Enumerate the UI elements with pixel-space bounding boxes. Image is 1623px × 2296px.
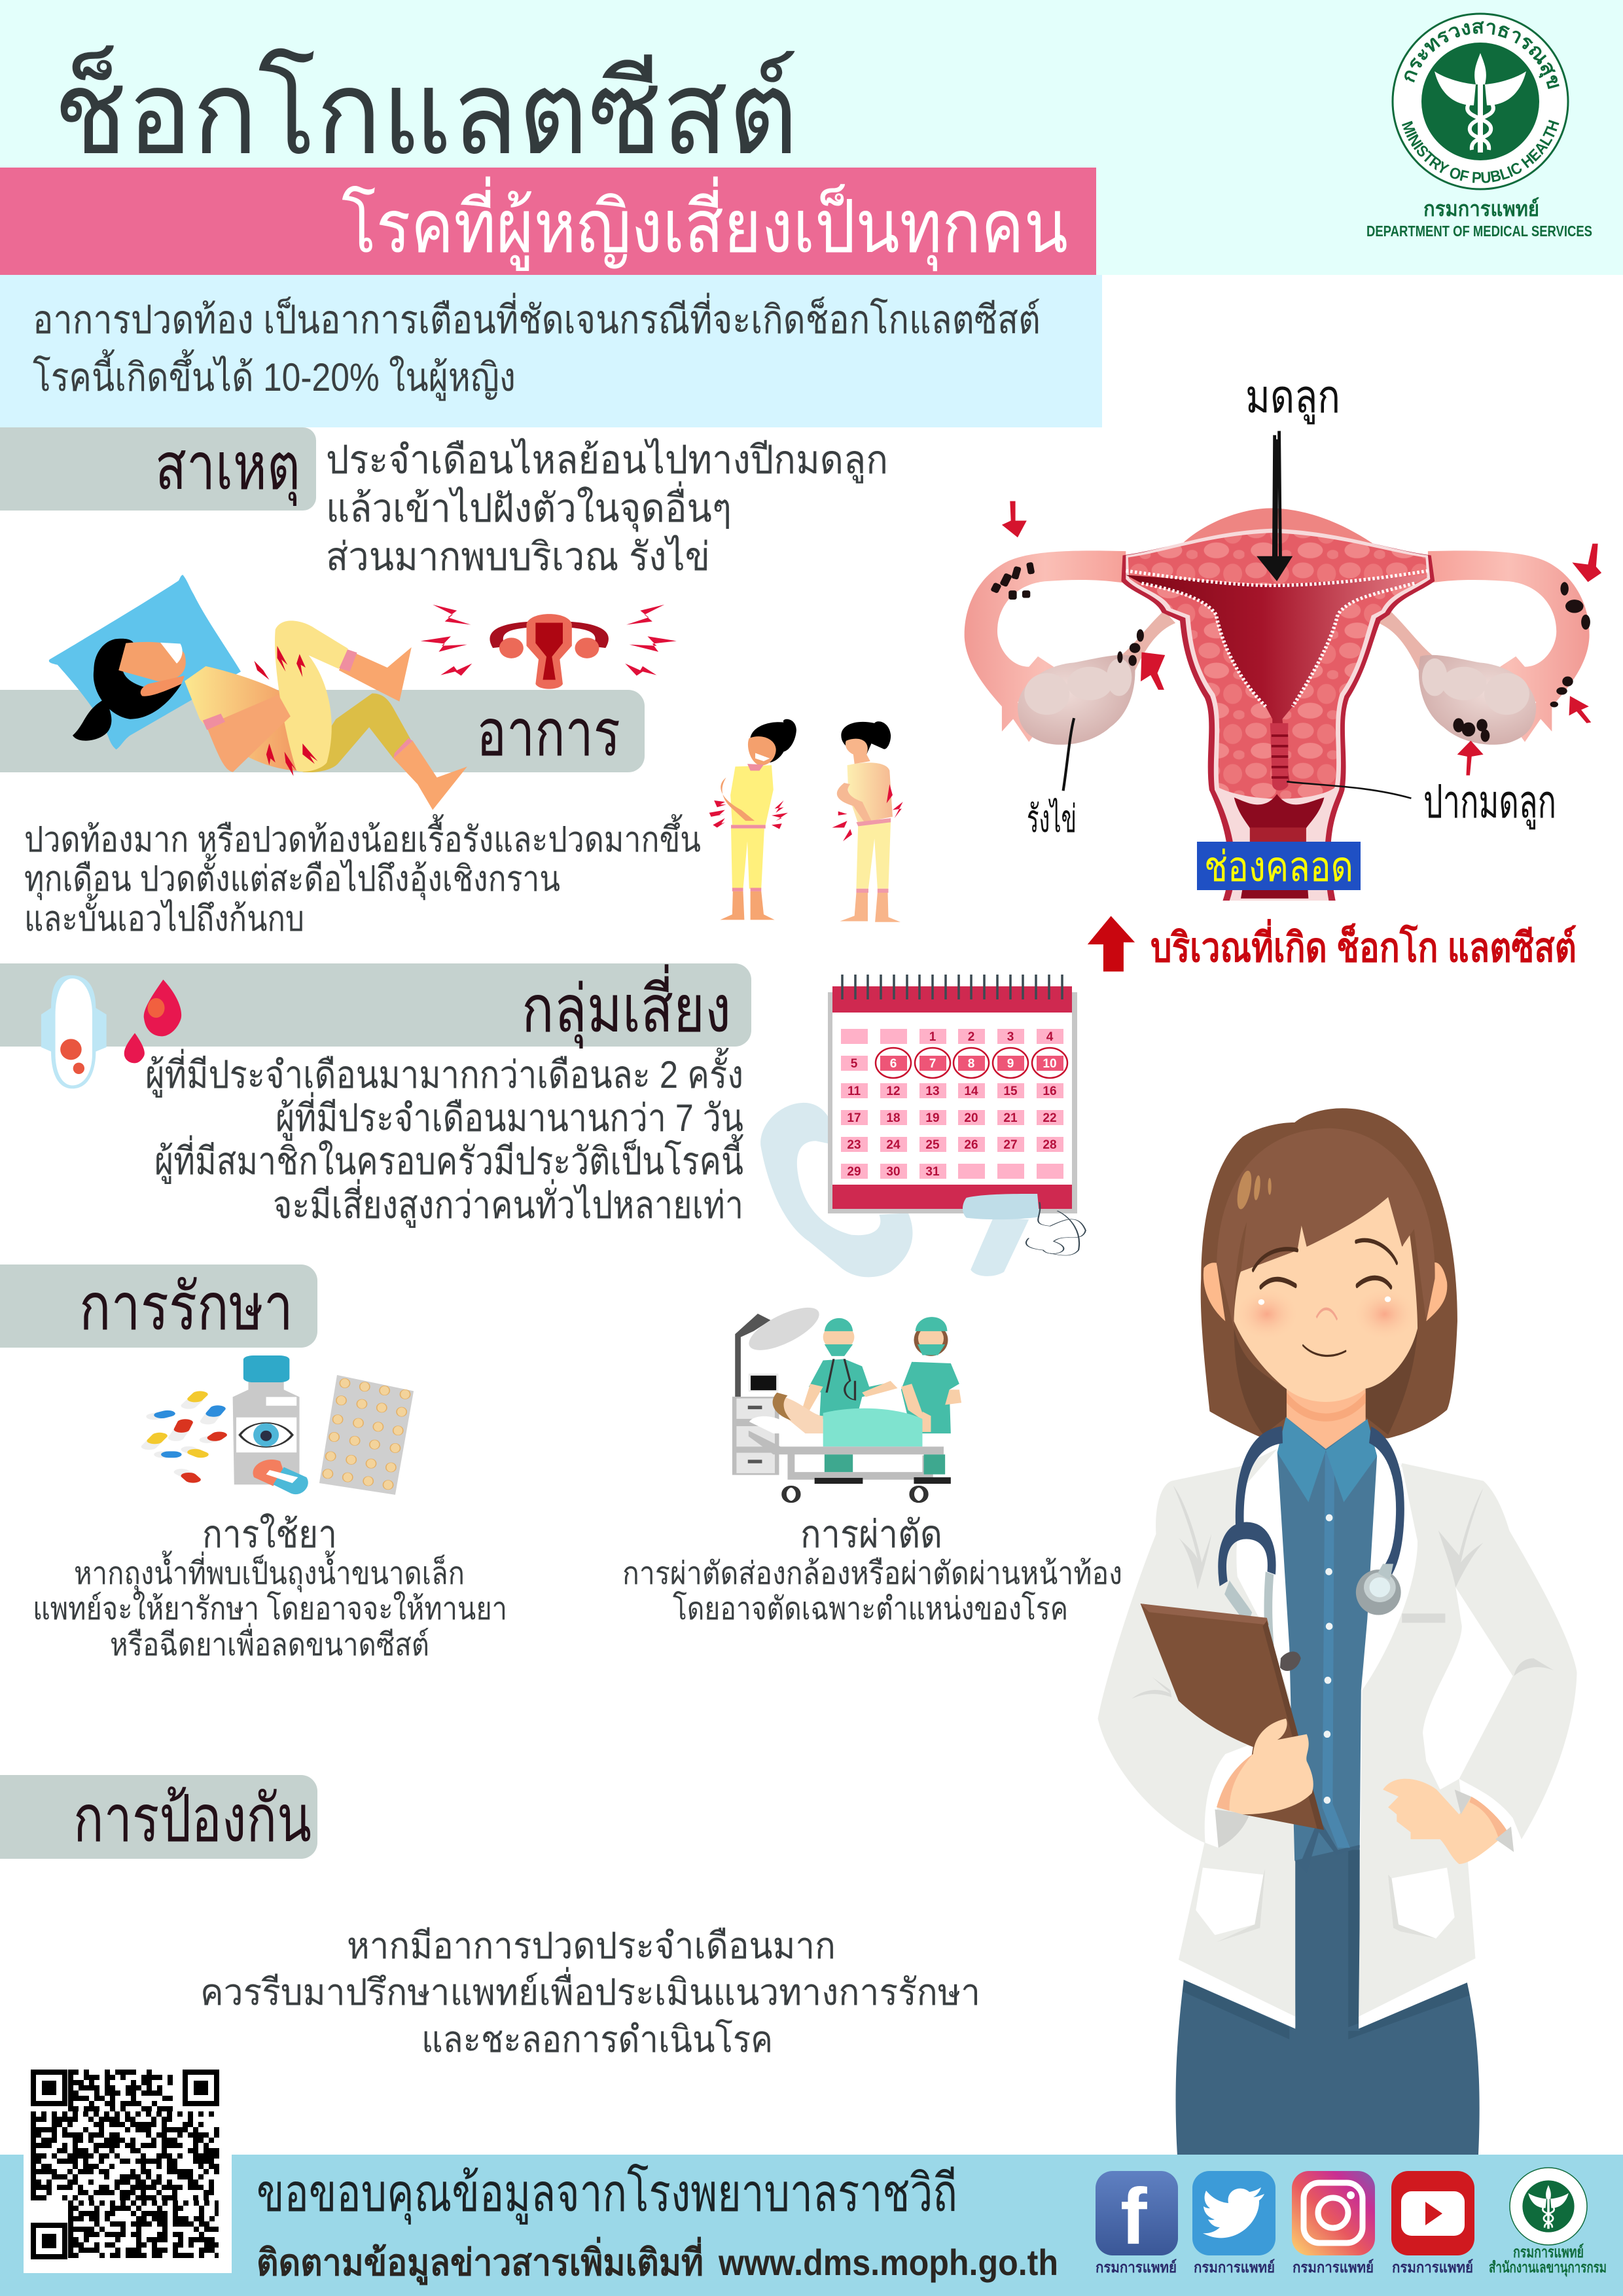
calendar: 24 bbox=[886, 1138, 901, 1152]
footer website text: www.dms.moph.go.th bbox=[718, 2242, 1058, 2283]
label: ovary: รังไข่ bbox=[1027, 797, 1077, 840]
risk groups text: จะมีเสี่ยงสูงกว่าคนทั่วไปหลายเท่า bbox=[273, 1179, 743, 1228]
calendar: 2 bbox=[968, 1030, 974, 1044]
risk groups text bbox=[145, 1048, 743, 1228]
icon: sanitary pad and blood drops bbox=[41, 975, 181, 1088]
calendar: 23 bbox=[847, 1138, 861, 1152]
treatment: medication: การใช้ยา bbox=[202, 1513, 337, 1556]
treatment: medication bbox=[33, 1513, 507, 1662]
footer website text bbox=[257, 2236, 1058, 2286]
icon: twitter: กรมการแพทย์ bbox=[1194, 2259, 1275, 2276]
title: ช็อกโกแลตซีสต์ bbox=[54, 45, 798, 178]
calendar: 15 bbox=[1003, 1085, 1018, 1098]
section: causes heading bbox=[0, 427, 316, 511]
causes text: ประจำเดือนไหลย้อนไปทางปีกมดลูก bbox=[326, 437, 888, 484]
prevention text: ควรรีบมาปรึกษาแพทย์เพื่อประเมินแนวทางการรักษา bbox=[200, 1967, 980, 2013]
icon: twitter bbox=[1192, 2171, 1275, 2276]
logo: department of medical services: กระทรวงสาธารณสุข bbox=[1404, 21, 1560, 89]
illustration: doctor bbox=[1098, 1108, 1577, 2159]
risk groups text: ผู้ที่มีประจำเดือนมามากกว่าเดือนละ 2 ครั้ง bbox=[145, 1048, 743, 1098]
label: vagina: ช่องคลอด bbox=[1204, 843, 1353, 890]
footer thanks text: ขอขอบคุณข้อมูลจากโรงพยาบาลราชวิถี bbox=[257, 2163, 957, 2225]
calendar: 3 bbox=[1007, 1030, 1014, 1044]
causes text bbox=[326, 437, 888, 579]
calendar: 1 bbox=[929, 1030, 936, 1044]
icons: capsules bbox=[149, 1394, 219, 1480]
treatment: medication: หากถุงน้ำที่พบเป็นถุงน้ำขนาดเล็ก bbox=[74, 1551, 465, 1592]
prevention text: หากมีอาการปวดประจำเดือนมาก bbox=[347, 1925, 836, 1966]
symptoms text: และบั้นเอวไปถึงก้นกบ bbox=[24, 893, 304, 939]
calendar: 9 bbox=[1007, 1057, 1014, 1071]
label: cervix: ปากมดลูก bbox=[1423, 776, 1556, 830]
symptoms text bbox=[24, 814, 701, 939]
intro panel bbox=[0, 275, 1102, 427]
intro text: โรคนี้เกิดขึ้นได้ 10-20% ในผู้หญิง bbox=[33, 349, 516, 401]
subtitle: โรคที่ผู้หญิงเสี่ยงเป็นทุกคน bbox=[342, 176, 1068, 272]
illustration: surgery team bbox=[732, 1304, 961, 1502]
calendar: 4 bbox=[1046, 1030, 1054, 1044]
symptoms text: ปวดท้องมาก หรือปวดท้องน้อยเรื้อรังและปวดมากขึ้น bbox=[24, 814, 701, 859]
calendar: 12 bbox=[886, 1085, 901, 1098]
treatment: surgery bbox=[622, 1513, 1122, 1626]
logo: footer: กรมการแพทย์ bbox=[1513, 2243, 1584, 2261]
footer website text: ติดตามข้อมูลข่าวสารเพิ่มเติมที่ bbox=[257, 2236, 704, 2286]
calendar: 28 bbox=[1043, 1138, 1057, 1152]
intro text: อาการปวดท้อง เป็นอาการเตือนที่ชัดเจนกรณีที่จะเกิดช็อกโกแลตซีสต์ bbox=[33, 293, 1041, 342]
section: risk groups heading: กลุ่มเสี่ยง bbox=[522, 964, 731, 1049]
icon: facebook bbox=[1096, 2171, 1178, 2276]
icon: youtube: กรมการแพทย์ bbox=[1392, 2259, 1473, 2276]
pink subtitle band bbox=[0, 168, 1096, 275]
section: treatment heading: การรักษา bbox=[79, 1270, 293, 1344]
risk groups text: ผู้ที่มีประจำเดือนมานานกว่า 7 วัน bbox=[276, 1092, 743, 1141]
calendar: 11 bbox=[847, 1085, 861, 1098]
calendar: 27 bbox=[1003, 1138, 1018, 1152]
calendar: 25 bbox=[925, 1138, 940, 1152]
calendar: 13 bbox=[925, 1085, 940, 1098]
illustration: tampon and string bbox=[963, 1194, 1086, 1276]
illustration: pale pad behind calendar bbox=[760, 1103, 912, 1277]
icon: facebook: f bbox=[1120, 2172, 1147, 2261]
calendar: 29 bbox=[847, 1165, 861, 1179]
illustration: two standing girls with abdominal pain bbox=[709, 719, 903, 922]
calendar bbox=[828, 975, 1077, 1213]
icon: instagram bbox=[1292, 2171, 1375, 2276]
logo: footer bbox=[1489, 2168, 1607, 2277]
intro text bbox=[33, 293, 1041, 401]
diagram: uterus anatomy bbox=[965, 371, 1601, 971]
calendar: 22 bbox=[1043, 1111, 1057, 1125]
prevention text bbox=[200, 1925, 980, 2060]
calendar: 19 bbox=[925, 1111, 940, 1125]
section: symptoms heading: อาการ bbox=[476, 696, 620, 770]
calendar: 26 bbox=[964, 1138, 978, 1152]
calendar: 7 bbox=[929, 1057, 936, 1071]
treatment: surgery: โดยอาจตัดเฉพาะตำแหน่งของโรค bbox=[673, 1590, 1068, 1626]
header band bbox=[0, 0, 1623, 275]
calendar: 6 bbox=[890, 1057, 897, 1071]
logo: department of medical services bbox=[1366, 13, 1592, 240]
section: causes heading: สาเหตุ bbox=[155, 430, 300, 507]
icon: youtube bbox=[1391, 2171, 1474, 2276]
causes text: ส่วนมากพบบริเวณ รังไข่ bbox=[326, 534, 710, 579]
section: symptoms heading bbox=[0, 690, 645, 772]
calendar: 16 bbox=[1043, 1085, 1057, 1098]
logo: department of medical services: MINISTRY OF PUBLIC HEALTH bbox=[1402, 120, 1559, 183]
treatment: medication: แพทย์จะให้ยารักษา โดยอาจจะให้ทานยา bbox=[33, 1590, 507, 1626]
QR code bbox=[24, 2062, 232, 2273]
label: uterus: มดลูก bbox=[1245, 371, 1340, 425]
calendar: 10 bbox=[1043, 1057, 1057, 1071]
section: prevention heading: การป้องกัน bbox=[73, 1782, 312, 1856]
calendar: 20 bbox=[964, 1111, 978, 1125]
icon: uterus with pain marks bbox=[421, 605, 677, 689]
calendar: 17 bbox=[847, 1111, 861, 1125]
icon: facebook: กรมการแพทย์ bbox=[1096, 2259, 1177, 2276]
treatment: surgery: การผ่าตัด bbox=[800, 1513, 942, 1556]
calendar: 18 bbox=[886, 1111, 901, 1125]
calendar: 31 bbox=[925, 1165, 940, 1179]
logo: department of medical services: กรมการแพทย์ bbox=[1423, 197, 1539, 221]
calendar: 14 bbox=[964, 1085, 978, 1098]
calendar: 30 bbox=[886, 1165, 901, 1179]
section: risk groups heading bbox=[0, 963, 751, 1049]
illustration: woman lying in pain bbox=[49, 575, 677, 810]
illustration: medicine bbox=[149, 1355, 414, 1495]
risk groups text: ผู้ที่มีสมาชิกในครอบครัวมีประวัติเป็นโรคนี้ bbox=[154, 1134, 743, 1184]
cervix canal bbox=[1270, 723, 1288, 791]
footer band bbox=[0, 2155, 1623, 2296]
treatment: medication: หรือฉีดยาเพื่อลดขนาดซีสต์ bbox=[110, 1623, 429, 1662]
calendar: 5 bbox=[851, 1057, 858, 1071]
section: prevention heading bbox=[0, 1775, 317, 1859]
prevention text: และชะลอการดำเนินโรค bbox=[421, 2018, 773, 2060]
causes text: แล้วเข้าไปฝังตัวในจุดอื่นๆ bbox=[326, 481, 732, 532]
icon: instagram: กรมการแพทย์ bbox=[1293, 2259, 1374, 2276]
symptoms text: ทุกเดือน ปวดตั้งแต่สะดือไปถึงอุ้งเชิงกราน bbox=[24, 853, 560, 901]
section: treatment heading bbox=[0, 1265, 317, 1348]
calendar: 8 bbox=[968, 1057, 974, 1071]
calendar: 21 bbox=[1003, 1111, 1018, 1125]
treatment: surgery: การผ่าตัดส่องกล้องหรือผ่าตัดผ่านหน้าท้อง bbox=[622, 1556, 1122, 1591]
